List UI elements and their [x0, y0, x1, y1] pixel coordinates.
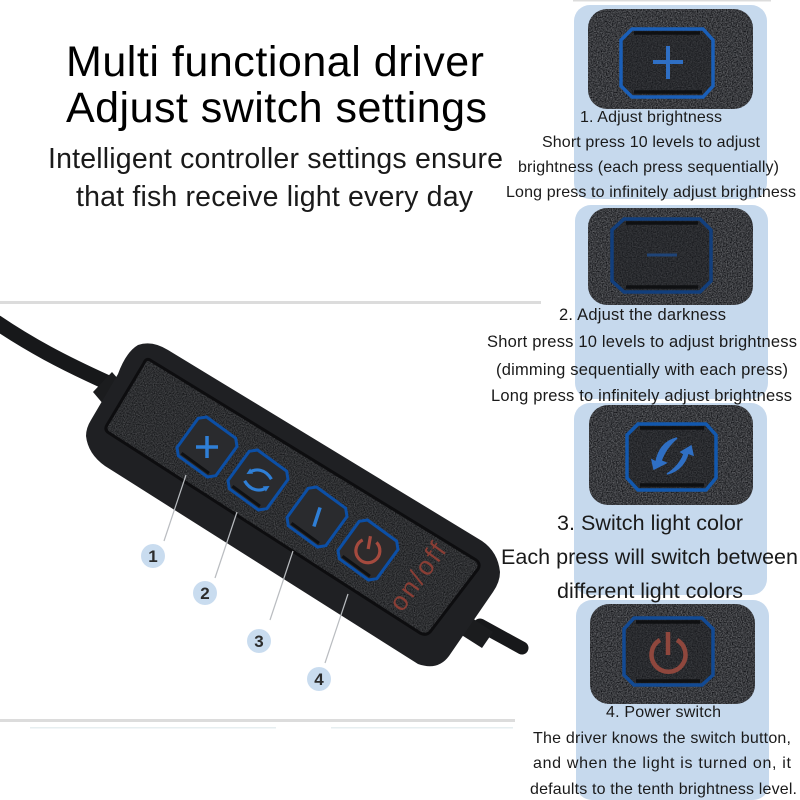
text: adjust brightness	[506, 109, 796, 201]
panel: adjust brightness	[574, 5, 767, 199]
callout number 4: 4	[314, 670, 324, 689]
subtitle: Intelligent controller settings ensure	[48, 143, 503, 175]
title: Multi functional driver	[66, 38, 484, 86]
text: adjust brightness: 1. Adjust brightness	[580, 109, 722, 126]
callout number 2: 2	[200, 584, 210, 603]
callout number 4	[307, 667, 331, 691]
text: adjust brightness: brightness (each press sequentially)	[518, 159, 779, 176]
text: power switch: defaults to the tenth brightness level.	[530, 781, 797, 798]
text: switch light color: 3. Switch light color	[557, 511, 743, 535]
cable right	[480, 625, 522, 648]
title: Adjust switch settings	[66, 84, 487, 132]
icon: plus button	[588, 9, 753, 109]
driver controller illustration	[0, 322, 522, 666]
text: adjust brightness: Long press to infinitely adjust brightness	[506, 184, 796, 201]
text: adjust the darkness: Long press to infinitely adjust brightness	[491, 387, 792, 405]
text: adjust the darkness: 2. Adjust the darkness	[559, 306, 726, 324]
icon: power button	[590, 604, 755, 704]
text: switch light color: different light colors	[557, 579, 743, 603]
button: plus	[173, 413, 241, 481]
callout number 1: 1	[148, 547, 158, 566]
text: power switch: The driver knows the switch button,	[533, 730, 791, 747]
cable left	[0, 322, 106, 382]
icon: color switch button	[589, 405, 753, 505]
on/off print: on/off	[383, 536, 453, 617]
callout number 3	[247, 629, 271, 653]
text: power switch: 4. Power switch	[606, 704, 721, 721]
text: power switch: and when the light is turned on, it	[533, 755, 792, 772]
button: power	[334, 516, 402, 584]
text: adjust brightness: Short press 10 levels to adjust	[542, 134, 761, 151]
callout number 3: 3	[254, 632, 264, 651]
text: switch light color	[501, 511, 798, 603]
panel: switch light color	[574, 403, 767, 595]
button: color switch	[224, 446, 292, 514]
text: adjust the darkness: (dimming sequentially with each press)	[496, 361, 788, 379]
panel: adjust the darkness	[575, 205, 768, 399]
text: adjust the darkness	[487, 306, 797, 405]
panel: power switch	[576, 600, 769, 800]
callout number 2	[193, 581, 217, 605]
subtitle	[48, 143, 503, 213]
title	[66, 38, 487, 132]
subtitle: that fish receive light every day	[76, 181, 474, 213]
text: adjust the darkness: Short press 10 levels to adjust brightness	[487, 333, 797, 351]
icon: minus button	[588, 208, 753, 305]
callout number 1	[141, 544, 165, 568]
text: switch light color: Each press will switch between	[501, 545, 798, 569]
button: minus	[283, 483, 351, 551]
controller body	[86, 343, 500, 666]
text: power switch	[530, 704, 797, 798]
leader lines	[164, 475, 348, 663]
